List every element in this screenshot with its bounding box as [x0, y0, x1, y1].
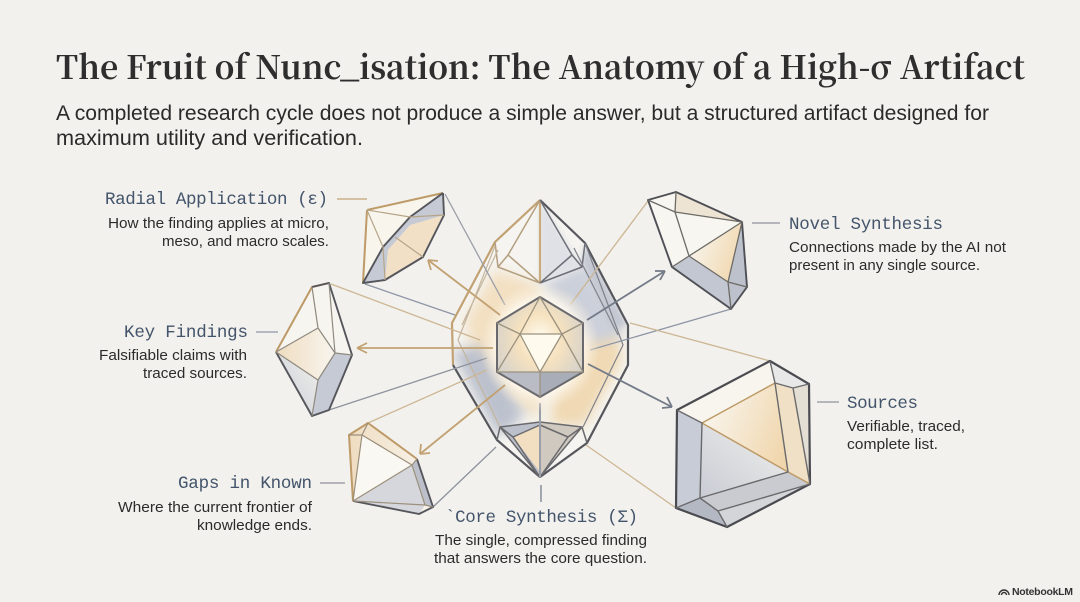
subtitle: maximum utility and verification. — [56, 127, 363, 150]
label: key findings — [99, 323, 278, 382]
label: radial application: meso, and macro scales. — [162, 233, 329, 250]
label: gaps in known: knowledge ends. — [197, 517, 312, 534]
label: radial application: How the finding applies at micro, — [108, 215, 329, 232]
label: core synthesis — [434, 485, 647, 567]
title: The Fruit of Nunc_isation: The Anatomy of a High-σ Artifact — [56, 43, 1025, 89]
label: radial application — [105, 190, 367, 250]
label: sources: Sources — [847, 394, 918, 414]
label: radial application: Radial Application (ε) — [105, 190, 328, 210]
label: gaps in known: Gaps in Known — [178, 474, 312, 494]
label: sources: Verifiable, traced, — [847, 418, 965, 435]
label: novel synthesis: Connections made by the AI not — [789, 239, 1007, 256]
label: novel synthesis: Novel Synthesis — [789, 215, 943, 235]
gem: gaps in known — [349, 423, 433, 514]
label: core synthesis: `Core Synthesis (Σ) — [445, 508, 638, 528]
label: sources: complete list. — [847, 436, 938, 453]
central large gem — [452, 200, 628, 477]
label: gaps in known: Where the current frontier of — [118, 499, 313, 516]
gem: novel synthesis — [648, 192, 747, 309]
subtitle — [56, 102, 989, 150]
soft shading — [452, 200, 628, 477]
label: core synthesis: The single, compressed finding — [435, 532, 647, 549]
label: key findings: traced sources. — [143, 365, 247, 382]
label: novel synthesis — [752, 215, 1007, 274]
label: key findings: Key Findings — [124, 323, 248, 343]
gem: key findings — [276, 283, 352, 416]
gem: radial application — [363, 193, 444, 283]
label: sources — [817, 394, 965, 453]
central hexagonal core — [497, 297, 583, 397]
arrows from the core — [357, 260, 672, 454]
gem outline — [452, 200, 628, 477]
label: gaps in known — [118, 474, 345, 534]
label: novel synthesis: present in any single source. — [789, 257, 980, 274]
connector lines between gems — [329, 194, 770, 508]
label: key findings: Falsifiable claims with — [99, 347, 247, 364]
subtitle: A completed research cycle does not produce a simple answer, but a structured artifact designed for — [56, 102, 989, 125]
gem: sources — [676, 361, 810, 527]
logo: NotebookLM: NotebookLM — [1012, 586, 1073, 598]
label: core synthesis: that answers the core question. — [434, 550, 647, 567]
core glow — [480, 283, 600, 411]
